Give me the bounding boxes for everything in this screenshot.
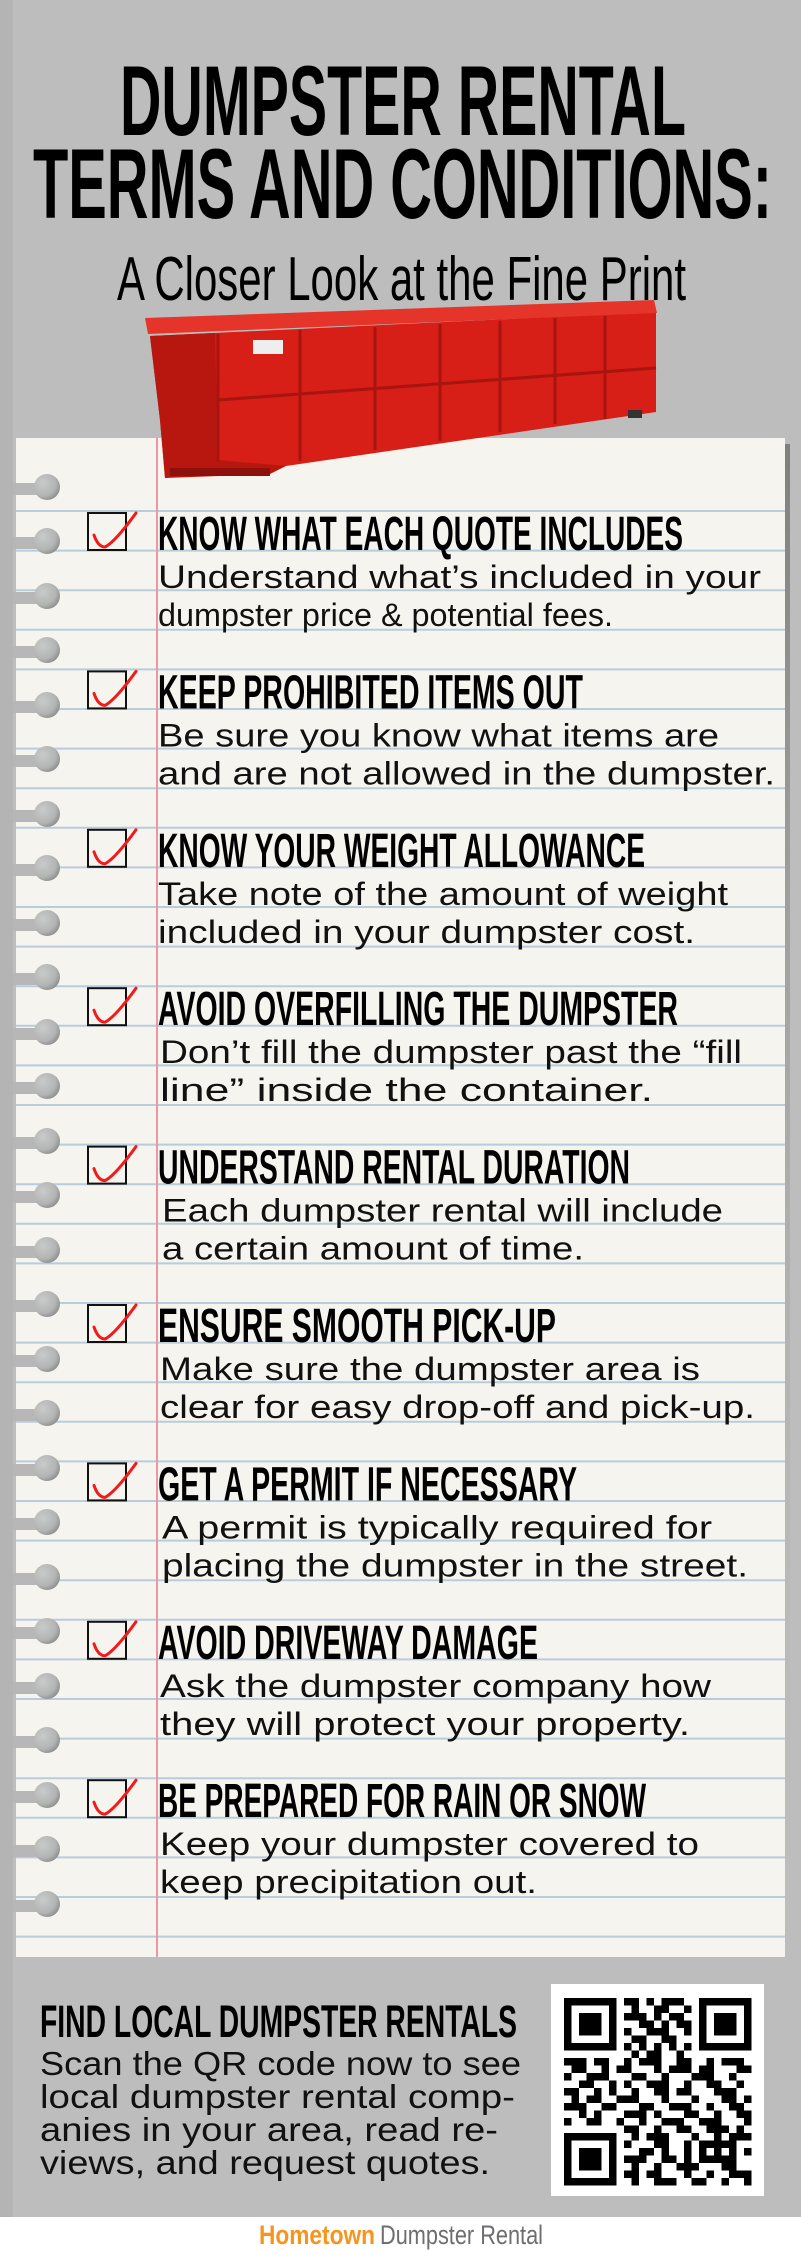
panel: find local dumpster rentals: local dumpster rental comp-: [40, 2078, 515, 2115]
icon: QR code: [551, 1984, 764, 2196]
icon: red dumpster: [145, 300, 657, 478]
icon: checkbox: [88, 513, 136, 550]
item 3: [88, 825, 728, 950]
item 6: Make sure the dumpster area is: [160, 1351, 700, 1387]
item 1: [88, 508, 761, 633]
panel: notebook paper: [13, 438, 790, 1962]
item 4: line” inside the container.: [160, 1072, 653, 1108]
footer logo: Hometown: [259, 2220, 375, 2250]
item 7: A permit is typically required for: [162, 1509, 712, 1545]
item 4: [88, 983, 742, 1108]
footer logo: [259, 2220, 543, 2250]
item 9: [88, 1775, 699, 1900]
item 9: keep precipitation out.: [160, 1864, 537, 1900]
item 6: ENSURE SMOOTH PICK-UP: [158, 1300, 556, 1353]
item 8: [88, 1617, 712, 1742]
item 8: Ask the dumpster company how: [160, 1668, 712, 1704]
title: [33, 45, 772, 239]
item 9: Keep your dumpster covered to: [160, 1826, 699, 1862]
panel: find local dumpster rentals: FIND LOCAL DUMPSTER RENTALS: [40, 1996, 517, 2047]
item 2: [88, 666, 775, 791]
panel: find local dumpster rentals: Scan the QR code now to see: [40, 2045, 521, 2082]
footer logo: Dumpster Rental: [380, 2220, 543, 2250]
ruled lines: [16, 511, 785, 1937]
panel: find local dumpster rentals: anies in your area, read re-: [40, 2111, 498, 2148]
item 2: Be sure you know what items are: [158, 717, 719, 753]
item 3: included in your dumpster cost.: [158, 914, 695, 950]
panel: find local dumpster rentals: views, and request quotes.: [40, 2144, 490, 2181]
item 5: a certain amount of time.: [162, 1231, 584, 1267]
item 6: clear for easy drop-off and pick-up.: [160, 1389, 755, 1425]
item 3: Take note of the amount of weight: [158, 876, 728, 912]
panel: find local dumpster rentals: [40, 1996, 521, 2181]
item 7: placing the dumpster in the street.: [162, 1547, 748, 1583]
item 8: they will protect your property.: [160, 1706, 690, 1742]
binder holes: [13, 474, 60, 1917]
margin line: [156, 438, 158, 1957]
item 1: Understand what’s included in your: [158, 559, 761, 595]
item 5: [88, 1142, 723, 1267]
item 4: Don’t fill the dumpster past the “fill: [160, 1034, 742, 1070]
item 6: [88, 1300, 755, 1425]
item 5: Each dumpster rental will include: [162, 1193, 723, 1229]
item 8: AVOID DRIVEWAY DAMAGE: [158, 1617, 538, 1670]
item 1: dumpster price & potential fees.: [158, 597, 613, 633]
item 7: [88, 1458, 748, 1583]
item 2: and are not allowed in the dumpster.: [158, 755, 775, 791]
